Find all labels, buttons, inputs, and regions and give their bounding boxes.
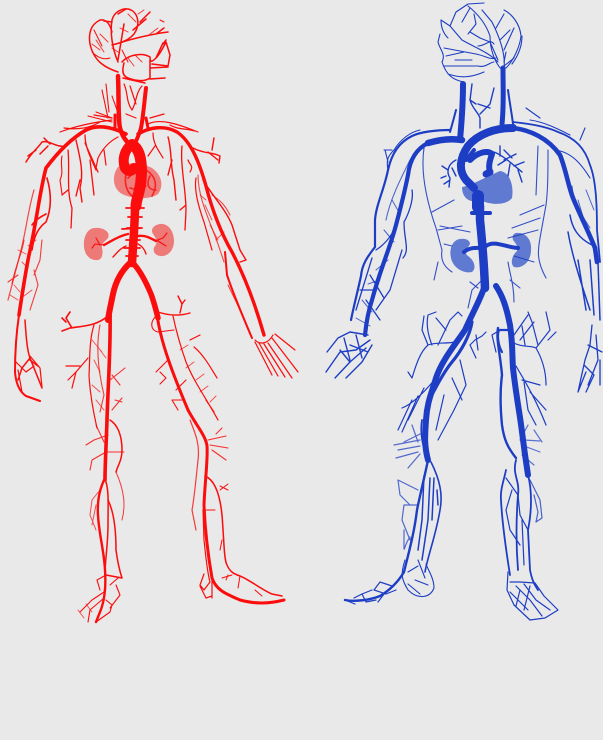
vessels: left hand: [16, 356, 42, 392]
vessels: left arm: [351, 130, 450, 335]
organ: right kidney: [152, 224, 174, 256]
vessels: right arm: [138, 128, 264, 338]
vessels: inferior vena cava: [464, 196, 518, 288]
vessels: right lung: [494, 146, 524, 182]
vessels: left leg: [62, 310, 125, 622]
organ: left kidney: [450, 239, 475, 272]
vessels: right hand: [255, 334, 298, 378]
vessels: superior vena cava: [428, 128, 513, 188]
vessels: neck and aortic arch: [88, 76, 148, 146]
vessels: left leg: [345, 288, 484, 604]
vessels: pulmonary trunk: [470, 152, 492, 174]
vessels: right shoulder and chest branches: [148, 114, 220, 250]
figure: venous system (blue): [326, 3, 602, 620]
organ: left kidney: [84, 228, 109, 260]
vessels: chest and abdomen tributaries: [423, 146, 548, 308]
vessels: left hand: [326, 332, 372, 378]
organ: heart: [114, 163, 161, 198]
vessels: aorta: [104, 144, 156, 263]
vessels: head veins: [438, 3, 522, 82]
figure: arterial system (red): [8, 9, 298, 622]
vessels: right leg: [496, 286, 558, 620]
vessels: left arm: [8, 127, 126, 401]
vessels: left lung: [441, 160, 456, 187]
vessels: right leg: [152, 296, 284, 603]
organ: heart: [462, 171, 512, 204]
vessels: right hand: [578, 325, 602, 392]
organ: right kidney: [512, 233, 531, 267]
vessels: right thigh branches: [492, 312, 556, 522]
vessels: jugular veins: [450, 68, 513, 140]
vessels: left shoulder and chest branches: [26, 115, 118, 228]
vessels: right arm: [513, 108, 600, 320]
vessels: head arteries: [89, 9, 170, 83]
vessels: iliac arteries: [108, 262, 158, 320]
vessels: left thigh branches: [394, 312, 486, 549]
